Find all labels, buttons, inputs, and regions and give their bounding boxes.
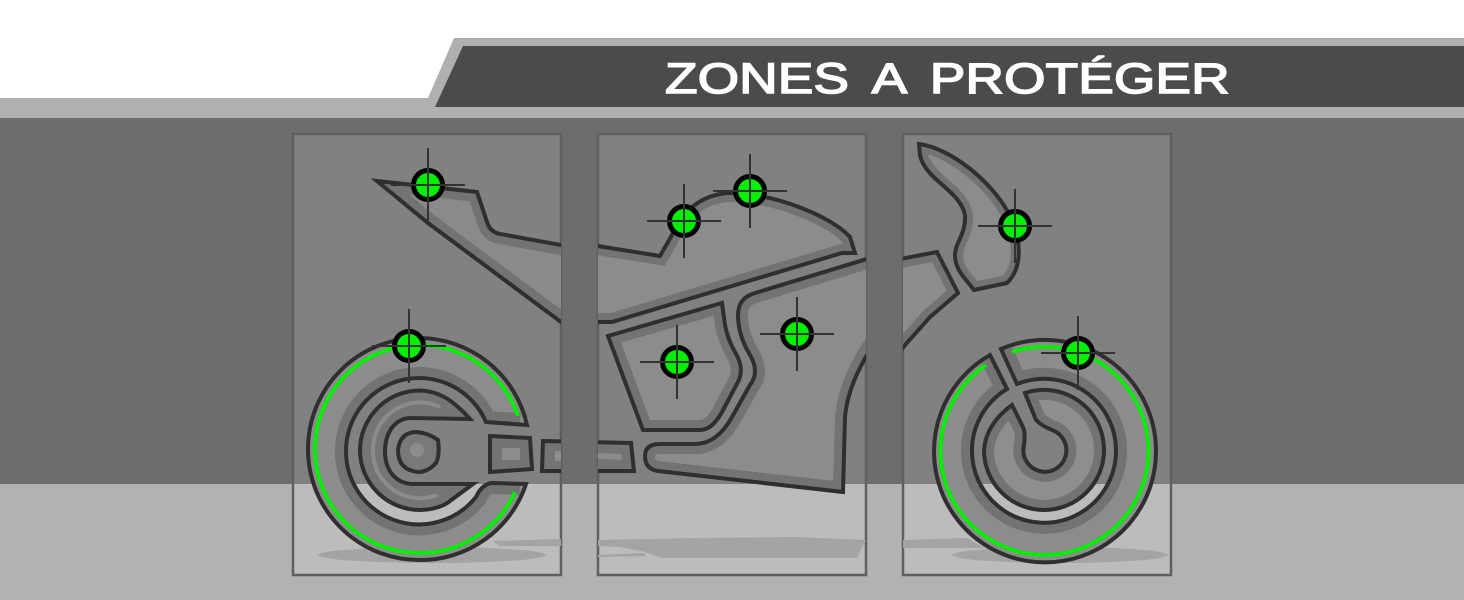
panel: centre section [596, 133, 868, 576]
swingarm right part [598, 440, 636, 473]
front body edge [903, 250, 960, 351]
target marker: headlight fairing [978, 189, 1052, 263]
target marker: tank [713, 154, 787, 228]
rear hub [398, 432, 439, 472]
target marker: seat [647, 184, 721, 258]
ground shadow: rear wheel [318, 539, 561, 563]
target marker: body side [760, 297, 834, 371]
front brake disc [984, 390, 1104, 510]
ground shadow: front wheel [903, 538, 1168, 563]
target marker: engine frame [640, 325, 714, 399]
background: garage wall [0, 118, 1464, 484]
target marker: rear wheel [372, 309, 446, 383]
target marker: front wheel [1041, 316, 1115, 390]
panel: rear section [292, 133, 562, 576]
title: ZONES A PROTÉGER [665, 55, 1230, 103]
rear tail fairing [370, 178, 561, 324]
background: floor [0, 484, 1464, 600]
tank and seat [560, 193, 855, 322]
engine frame panel [608, 303, 741, 430]
title banner outline [0, 38, 1464, 118]
lower body panel [645, 255, 880, 492]
ground shadow: centre [598, 537, 866, 558]
swingarm left part [540, 439, 561, 473]
rear tyre [308, 338, 527, 560]
headlight fairing [919, 144, 1019, 290]
rear sprocket [360, 390, 473, 510]
panel: front section [890, 134, 1171, 575]
front tyre [934, 340, 1156, 562]
green tyre highlight [941, 347, 1149, 555]
green tyre highlight [315, 345, 518, 553]
title banner [435, 46, 1464, 107]
target marker: tail [391, 148, 465, 222]
chain block [490, 436, 532, 472]
